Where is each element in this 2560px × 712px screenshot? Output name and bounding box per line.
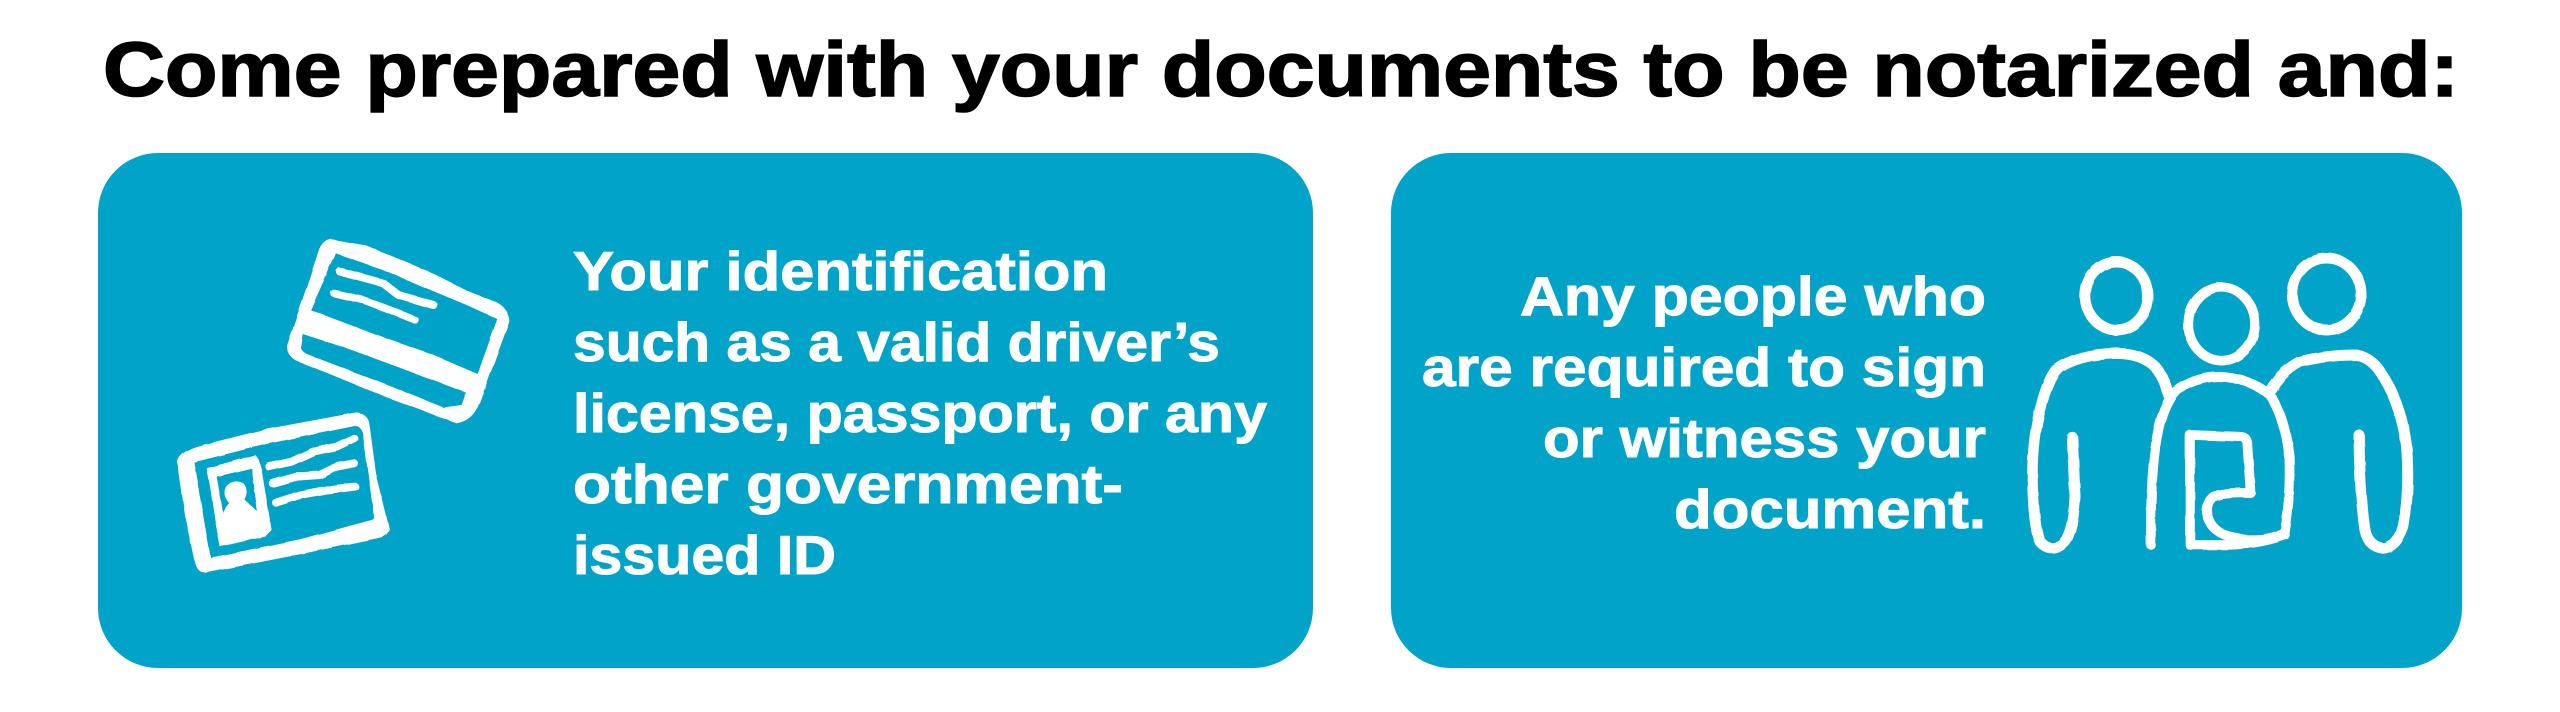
icon: three people [2033, 258, 2408, 548]
text block: identification: issued ID [573, 524, 836, 586]
text block: identification: such as a valid driver’s [573, 311, 1220, 373]
panel: identification [98, 153, 1313, 668]
person middle with document [2151, 287, 2290, 545]
text block: identification: other government- [573, 453, 1123, 515]
title: Come prepared with your documents to be notarized and: [103, 27, 2459, 113]
text block: identification: license, passport, or any [573, 382, 1267, 444]
person left [2033, 262, 2169, 548]
panel: people [1391, 153, 2462, 668]
text block: signers and witnesses: are required to sign [1422, 336, 1986, 398]
person right [2272, 258, 2408, 548]
text block: identification [573, 240, 1267, 586]
panel background: identification [98, 153, 1313, 668]
text block: identification: Your identification [573, 240, 1108, 302]
panel background: people [1391, 153, 2462, 668]
text block: signers and witnesses: or witness your [1543, 407, 1986, 469]
text block: signers and witnesses: document. [1674, 478, 1986, 540]
text block: signers and witnesses [1422, 265, 1986, 540]
icon: ID cards [178, 240, 508, 572]
text block: signers and witnesses: Any people who [1520, 265, 1986, 327]
front card with photo [178, 413, 388, 572]
back card [288, 240, 508, 422]
